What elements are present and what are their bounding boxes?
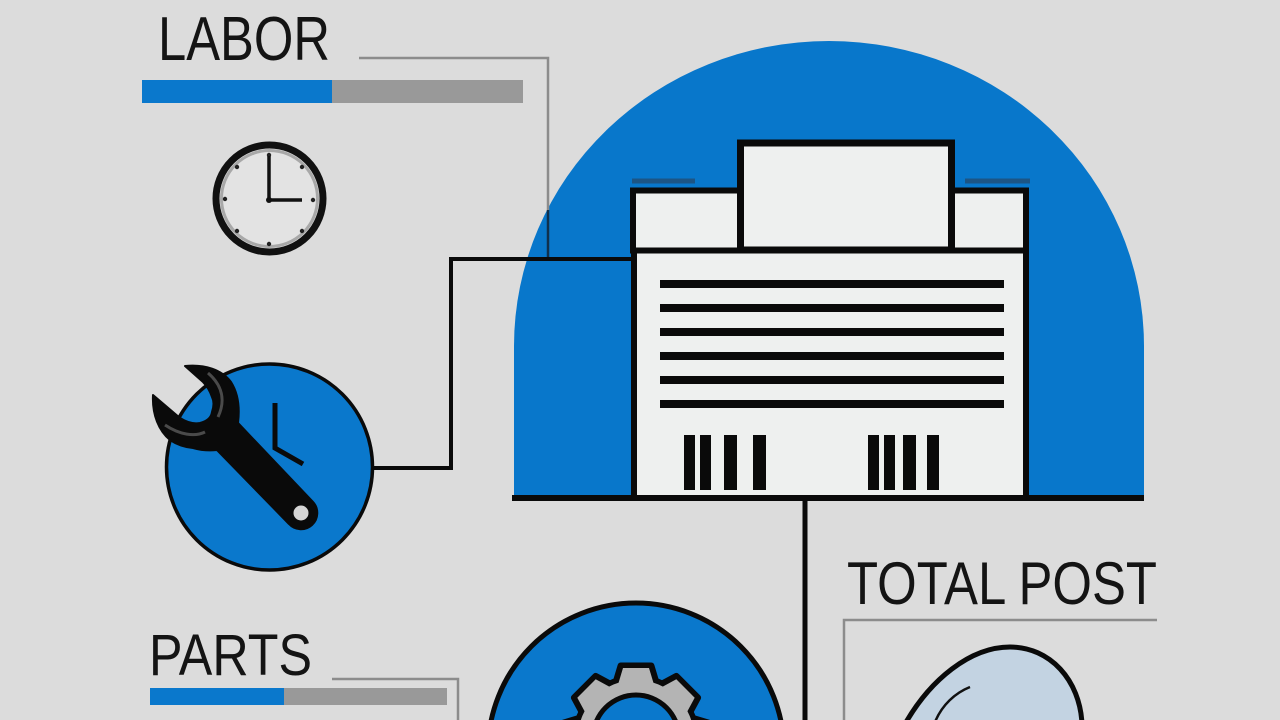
- icon: wrench and clock badge: [153, 364, 372, 570]
- panel: parts: [149, 623, 447, 705]
- heading: parts: PARTS: [149, 623, 312, 688]
- icon: building: [632, 143, 1030, 498]
- text lines: [660, 280, 1004, 408]
- panel: total post: [844, 550, 1157, 720]
- icon: light bulb: [905, 647, 1082, 720]
- icon: wall clock: [216, 145, 323, 252]
- progress bar: parts: [150, 688, 447, 705]
- connector: building to total post: [802, 500, 808, 720]
- dome base line: [512, 495, 1144, 501]
- dome background: [514, 41, 1144, 498]
- connector: total post leader line: [844, 620, 1157, 720]
- connector: wrench to building: [373, 259, 632, 468]
- panel: labor: [142, 5, 523, 252]
- heading: total post: TOTAL POST: [847, 550, 1157, 617]
- connector: labor leader line: [359, 58, 548, 259]
- barcode marks: [684, 435, 939, 490]
- connector: parts leader line: [332, 679, 458, 720]
- progress bar: labor: [142, 80, 523, 103]
- panel: service dome: [512, 41, 1144, 501]
- heading: labor: LABOR: [158, 5, 330, 74]
- icon: gear badge: [488, 603, 784, 720]
